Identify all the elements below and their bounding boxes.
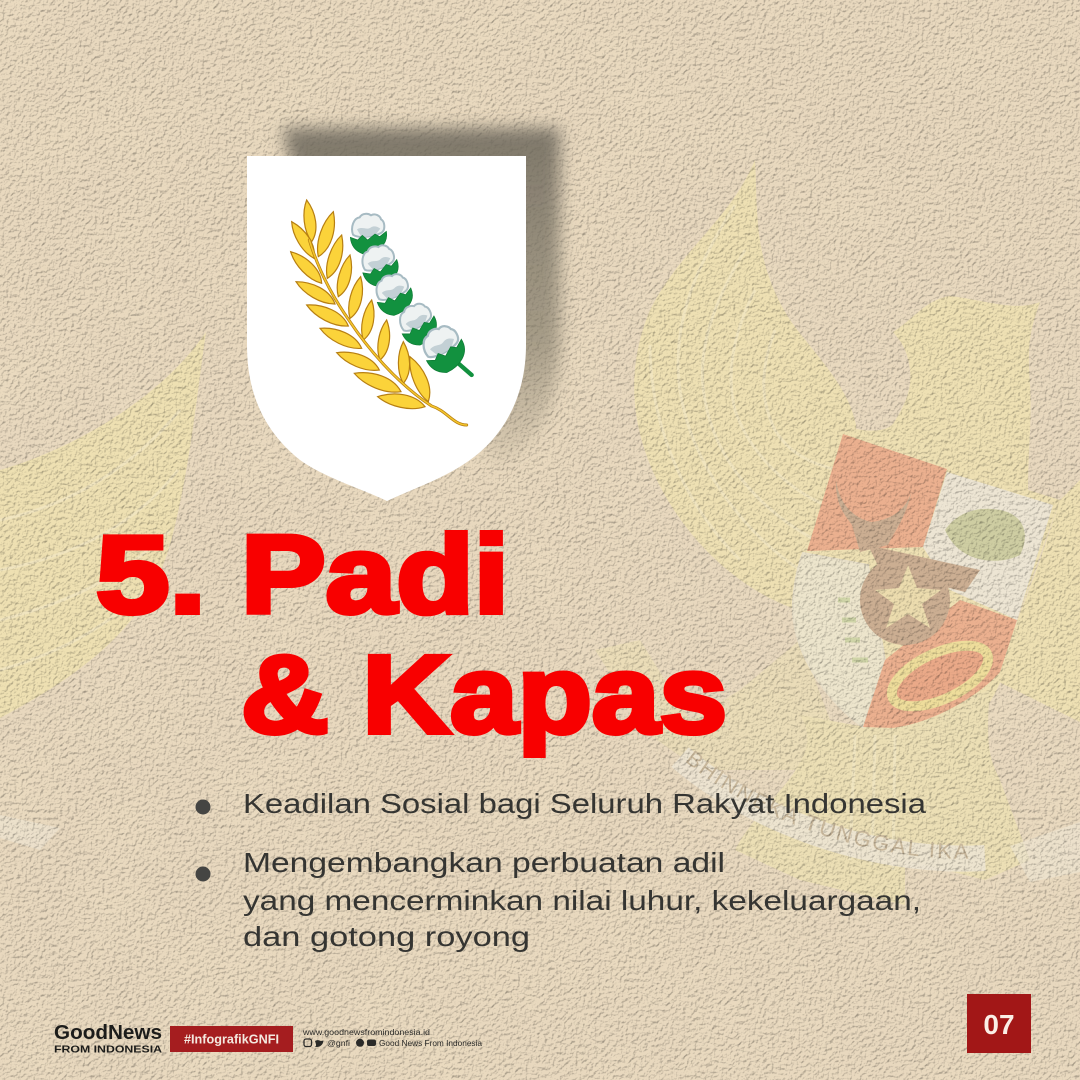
title line 2: & Kapas xyxy=(241,634,727,756)
bullet 1: Keadilan Sosial bagi Seluruh Rakyat Indonesia xyxy=(243,788,926,819)
footer contact: @gnfi xyxy=(327,1038,350,1048)
shield: white bottom-left xyxy=(793,553,885,727)
shield: bull head xyxy=(836,480,912,552)
icon: youtube xyxy=(367,1040,376,1046)
icon: twitter xyxy=(314,1040,324,1047)
Garuda tail claw xyxy=(595,640,830,770)
bullet 2: yang mencerminkan nilai luhur, kekeluargaan, xyxy=(243,885,921,916)
footer contact xyxy=(302,1027,482,1048)
footer contact: www.goodnewsfromindonesia.id xyxy=(302,1027,430,1037)
shield: cross band xyxy=(868,545,980,592)
footer logo: GoodNews xyxy=(54,1021,162,1044)
Garuda right wing xyxy=(995,480,1080,722)
Garuda big wing xyxy=(634,160,856,612)
bullet 2: dan gotong royong xyxy=(243,921,530,952)
icon: rice stalk xyxy=(287,199,467,425)
title number: 5. xyxy=(96,514,206,636)
title xyxy=(96,514,727,756)
bullet 2: Mengembangkan perbuatan adil xyxy=(243,847,725,878)
Garuda head, neck and body xyxy=(810,296,1060,735)
shield: white top-right xyxy=(923,472,1053,620)
page number: 07 xyxy=(983,1009,1015,1040)
watermark: left wing xyxy=(0,332,206,718)
shield: banyan tree xyxy=(945,509,1025,561)
page number xyxy=(967,994,1031,1053)
icon: facebook xyxy=(356,1039,364,1047)
title line 1: Padi xyxy=(241,514,509,636)
footer logo xyxy=(54,1021,162,1056)
ribbon with motto: BHINNEKA TUNGGAL IKA xyxy=(686,750,968,859)
watermark: Garuda emblem xyxy=(634,161,1080,904)
shield: star xyxy=(875,565,941,628)
hashtag badge xyxy=(170,1026,293,1052)
shield: red bottom-right xyxy=(863,600,1017,728)
shield: red top-left xyxy=(807,434,947,551)
shield: oval garland xyxy=(883,633,997,719)
hashtag badge: #InfografikGNFI xyxy=(184,1032,279,1046)
white shield xyxy=(247,156,526,501)
watermark: left ribbon end xyxy=(0,815,60,850)
footer contact: Good News From Indonesia xyxy=(379,1038,482,1048)
icon: instagram xyxy=(304,1039,312,1046)
right ribbon end xyxy=(1010,822,1080,882)
icon: cotton bolls xyxy=(350,214,472,378)
footer logo: FROM INDONESIA xyxy=(54,1044,162,1056)
shield: cotton and rice panel detail xyxy=(838,600,868,660)
shield: center circle xyxy=(860,555,950,645)
Garuda legs and tail xyxy=(735,690,1030,905)
bullet 2 xyxy=(196,847,921,952)
panel: shield emblem xyxy=(247,128,560,501)
shield drop shadow xyxy=(282,128,560,468)
